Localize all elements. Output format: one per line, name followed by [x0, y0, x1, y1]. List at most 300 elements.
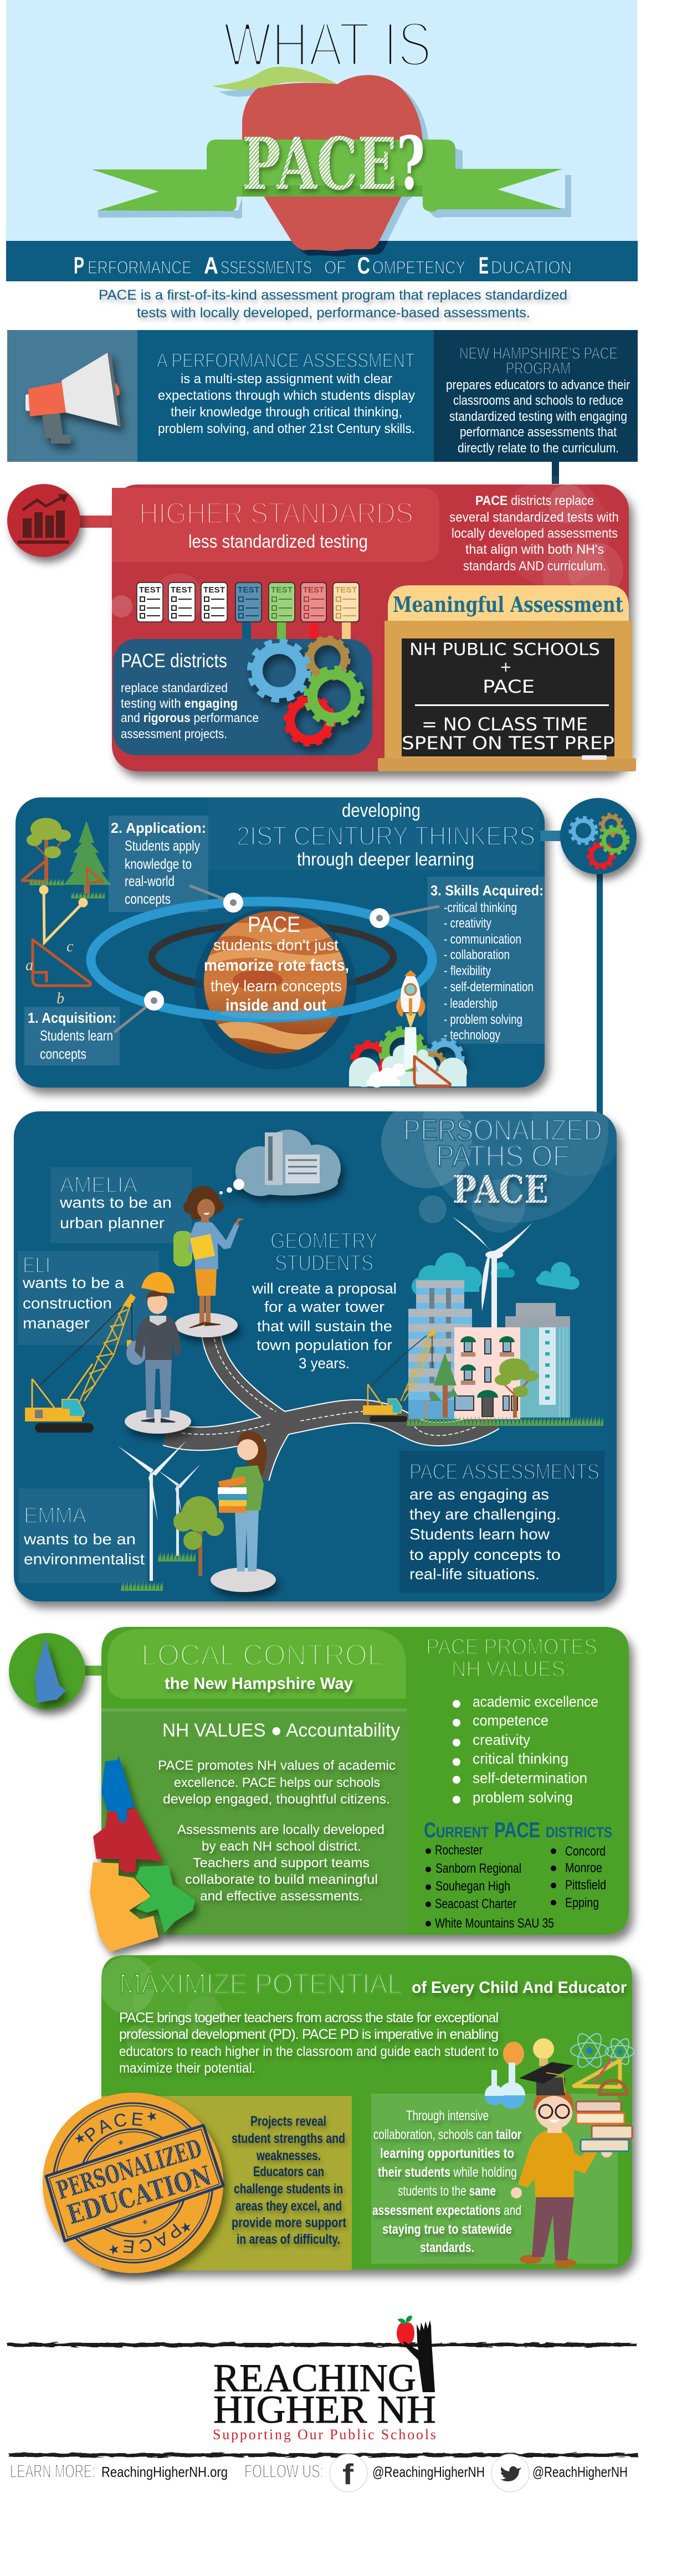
- text block: PACE districts replace: [449, 493, 619, 574]
- text block: geometry students: that will sustain the: [257, 1318, 392, 1335]
- glasses: [539, 2105, 569, 2118]
- text block: NH PACE program: standardized testing with engaging: [449, 409, 627, 424]
- text block: geometry students: [252, 1229, 397, 1372]
- tower left lower: [408, 1309, 472, 1419]
- acronym: Performance Assessments of Competency Education: C: [357, 253, 370, 279]
- card 2: TEST: [171, 585, 192, 595]
- panel background: [112, 485, 629, 771]
- smoke clouds: [349, 1045, 467, 1087]
- set square: [574, 2060, 620, 2087]
- text: projects reveal: Educators can: [253, 2164, 324, 2180]
- heading: current PACE districts: [424, 1818, 612, 1842]
- question mark: ?: [397, 121, 425, 207]
- body text: assessment projects.: [121, 727, 227, 741]
- hair: [146, 1290, 168, 1299]
- ruler triangle: [414, 1057, 450, 1086]
- panel: 21st century thinkers: [16, 797, 545, 1088]
- card 7: [333, 583, 359, 622]
- stars: ★: [72, 2130, 88, 2147]
- callout: Emma: wants to be an: [23, 1531, 136, 1548]
- illustration: orbit and planet: [91, 886, 438, 1069]
- subheading: less standardized testing: [188, 531, 368, 552]
- acronym: Performance Assessments of Competency Education: OMPETENCY: [372, 257, 465, 277]
- text: projects reveal: student strengths and: [232, 2131, 345, 2146]
- icon: twitter: [491, 2454, 529, 2492]
- trousers: [532, 2196, 574, 2260]
- heading: PACE promotes NH values: PACE PROMOTES: [426, 1635, 597, 1659]
- paragraph: professional development (PD). PACE PD is imperative in enabling: [119, 2027, 499, 2042]
- gears behind smoke: [352, 1028, 463, 1076]
- divider: brush line top: [8, 2343, 637, 2347]
- body text: [158, 1758, 396, 1904]
- panel: personalized paths: [12, 1111, 627, 1615]
- card 6: TEST: [303, 585, 324, 595]
- book stack: [576, 2101, 632, 2151]
- text: through intensive collaboration: assessment expectations and: [372, 2203, 521, 2218]
- stamp word: education: EDUCATION: [64, 2160, 215, 2231]
- text block: NH PACE program: directly relate to the curriculum.: [458, 441, 619, 456]
- apple shadow: [248, 80, 429, 255]
- stamp lettering ring: [72, 2108, 194, 2259]
- icon: apple: [397, 2316, 414, 2345]
- ribbon shadow strips: [98, 148, 571, 219]
- leaf: [212, 66, 337, 90]
- decorative bubbles: [100, 1956, 155, 2014]
- connector to higher standards: [552, 462, 559, 484]
- figure: Eli with crane: [25, 1272, 191, 1434]
- callout: Emma: environmentalist: [24, 1550, 145, 1568]
- dark ring: [152, 924, 393, 991]
- chalk text: +: [500, 659, 512, 676]
- hair: [533, 2088, 574, 2111]
- list: PACE districts: [425, 1843, 606, 1931]
- stamp banner: [46, 2125, 223, 2241]
- puzzle piece blue: [101, 1755, 135, 1823]
- panel: maximize potential: [40, 1955, 643, 2285]
- stars: *: [141, 2217, 150, 2232]
- text block: PACE districts replace: several standardized tests with: [449, 510, 619, 525]
- paragraph: [119, 2010, 499, 2076]
- illustration: road: [166, 1329, 493, 1478]
- intro text: tests with locally developed, performance-based assessments.: [137, 305, 530, 321]
- panel: local control: [83, 1627, 629, 1952]
- panel: higher standards: [78, 476, 629, 771]
- callout: skills: - communication: [444, 932, 521, 947]
- shoes: [520, 2255, 542, 2264]
- card 2: [168, 583, 195, 622]
- illustration: science icons: [485, 2031, 634, 2109]
- text block: PACE districts replace: locally developed assessments: [452, 526, 618, 541]
- text block: geometry students: for a water tower: [264, 1299, 384, 1315]
- subheading: the New Hampshire Way: [165, 1675, 353, 1693]
- icon: gears: [250, 638, 362, 744]
- callout: application: [109, 816, 208, 912]
- illustration: NH puzzle map: [90, 1755, 195, 1952]
- platform: [175, 1313, 238, 1337]
- heading: personalized paths of: [403, 1114, 602, 1173]
- books: [218, 1476, 248, 1513]
- card 5: [269, 583, 295, 622]
- heading: PACE promotes NH values: [426, 1635, 597, 1681]
- chalk text: = NO CLASS TIME: [422, 714, 588, 735]
- callout: Emma: EMMA: [24, 1503, 86, 1528]
- callout: Eli: manager: [23, 1315, 90, 1332]
- text block: PACE assessments: [399, 1451, 604, 1593]
- round tree: [495, 1358, 539, 1418]
- paragraph: PACE brings together teachers from across the state for exceptional: [119, 2010, 499, 2026]
- text block: a performance assessment: [157, 349, 415, 436]
- icon: chart circle: [7, 484, 80, 557]
- boom tip: [123, 1294, 136, 1308]
- list: NH values: critical thinking: [473, 1750, 568, 1767]
- acronym: Performance Assessments of Competency Education: A: [204, 253, 218, 279]
- pink building: [454, 1327, 520, 1419]
- card 1: [137, 583, 163, 622]
- body text: and rigorous performance: [121, 710, 259, 725]
- hand: [235, 1218, 244, 1226]
- card 1: TEST: [139, 585, 161, 595]
- skirt: [195, 1269, 217, 1296]
- list: NH values: [453, 1693, 598, 1806]
- text: projects reveal: in areas of difficulty.: [237, 2232, 340, 2247]
- footer: [10, 2454, 628, 2492]
- wood frame: [384, 621, 632, 759]
- icon: gears badge: [540, 798, 637, 874]
- text: through intensive collaboration: their students while holding: [378, 2165, 517, 2180]
- legs: [199, 1295, 204, 1323]
- callout: application: real-world: [125, 873, 175, 889]
- card 7: TEST: [335, 585, 357, 595]
- wind turbine large: [117, 1441, 186, 1581]
- pine tree: [429, 1353, 458, 1418]
- acronym: Performance Assessments of Competency Education: ERFORMANCE: [88, 257, 192, 277]
- panel: PACE districts: [113, 638, 372, 755]
- hair: [237, 1431, 267, 1478]
- callout: application: knowledge to: [125, 856, 192, 872]
- apple and ribbon illustration: [6, 66, 638, 281]
- heading: personalized paths of: PATHS OF: [436, 1140, 570, 1173]
- sweater: [518, 2131, 574, 2197]
- callout: Amelia: wants to be an: [59, 1194, 172, 1211]
- heading band: [107, 1629, 406, 1699]
- acronym: Performance Assessments of Competency Education: SSESSMENTS: [221, 257, 312, 277]
- sweater: [135, 1317, 181, 1360]
- PACE hatched wordmark: PACE: [242, 122, 397, 206]
- chalk: [582, 755, 607, 760]
- crane window: [35, 1410, 43, 1418]
- icon: megaphone: [25, 352, 121, 444]
- puzzle piece orange: [90, 1862, 158, 1952]
- list: PACE districts: Concord: [565, 1844, 606, 1859]
- tower right: [505, 1303, 570, 1418]
- text block: PACE districts replace: that align with both NH's: [465, 542, 604, 557]
- clouds: [412, 1253, 580, 1296]
- card connectors: [242, 620, 251, 640]
- text: through intensive collaboration: staying true to statewide: [382, 2222, 512, 2237]
- callout: Emma: [19, 1488, 147, 1583]
- heading band: [112, 488, 439, 562]
- collar: [150, 1316, 166, 1326]
- callout: skills: - flexibility: [444, 964, 491, 978]
- face: [237, 1439, 258, 1460]
- follow us: FOLLOW US:: [244, 2461, 324, 2481]
- tracks: [35, 1423, 94, 1433]
- text block: NH PACE program: prepares educators to advance their: [446, 378, 630, 393]
- text block: geometry students: GEOMETRY: [270, 1229, 378, 1253]
- leaf shadow: [219, 83, 260, 97]
- body text: develop engaged, thoughtful citizens.: [163, 1792, 390, 1807]
- top and arm: [188, 1222, 239, 1269]
- figure: teacher: [511, 2062, 632, 2268]
- rocket: [406, 1013, 416, 1029]
- heading: developing: developing: [342, 800, 421, 821]
- callout: Eli: construction: [23, 1295, 112, 1312]
- body text: excellence. PACE helps our schools: [174, 1775, 380, 1790]
- list: PACE districts: Monroe: [565, 1861, 602, 1876]
- grass: [407, 1416, 603, 1426]
- card 4: [235, 583, 262, 622]
- list: PACE districts: Rochester: [435, 1843, 483, 1858]
- callout: acquisition: Students learn: [40, 1027, 113, 1044]
- list: NH values: academic excellence: [473, 1693, 598, 1710]
- brain: [503, 2042, 524, 2066]
- crane body: [25, 1408, 82, 1421]
- website: ReachingHigherNH.org: [101, 2464, 228, 2480]
- callout: acquisition: 1. Acquisition:: [28, 1009, 116, 1026]
- paragraph: educators to reach higher in the classroom and guide each student to: [119, 2044, 499, 2059]
- hook: [127, 1340, 132, 1347]
- stars: [72, 2108, 194, 2259]
- icon: compass: [40, 887, 86, 942]
- callout: Eli: [18, 1251, 159, 1345]
- neck: [547, 2121, 562, 2133]
- decorative bubbles: [381, 1111, 617, 1233]
- hair: [183, 1186, 224, 1220]
- neck: [201, 1215, 209, 1223]
- stamp rings: [53, 2103, 213, 2263]
- tower left upper: [416, 1280, 464, 1310]
- book: [190, 1234, 215, 1260]
- wind turbine small: [158, 1464, 201, 1556]
- stamp: personalized education: [40, 2093, 232, 2284]
- stars: ★: [144, 2108, 160, 2125]
- text block: a performance assessment: their knowledge through critical thinking,: [171, 405, 402, 420]
- text block: a performance assessment: is a multi-step assignment with clear: [181, 372, 392, 387]
- text: projects reveal: weaknesses.: [256, 2148, 321, 2163]
- list: NH values: problem solving: [473, 1789, 573, 1806]
- text block: PACE districts replace: standards AND curriculum.: [463, 559, 606, 574]
- flower boxes: [461, 1352, 514, 1385]
- heading: PACE promotes NH values: NH VALUES:: [452, 1657, 571, 1681]
- shelf: [378, 758, 636, 771]
- text: projects reveal: challenge students in: [234, 2181, 343, 2197]
- callout: skills: - problem solving: [444, 1012, 522, 1027]
- callout: acquisition: [24, 1007, 120, 1065]
- ribbon inner shade: [242, 186, 423, 197]
- stamp banner inner line: [49, 2129, 219, 2237]
- heading: PACE districts: [121, 650, 227, 672]
- callout: application: Students apply: [125, 837, 200, 854]
- body text: testing with engaging: [121, 696, 238, 710]
- callout: skills: - self-determination: [444, 980, 534, 995]
- triangle labels: c: [66, 938, 74, 955]
- apple body: [242, 75, 423, 251]
- heading: current PACE districts: PACE: [494, 1818, 540, 1842]
- body text: Assessments are locally developed: [177, 1822, 384, 1837]
- hands: [601, 2146, 612, 2157]
- planet text: memorize rote facts,: [204, 956, 349, 975]
- jeans: [235, 1509, 259, 1572]
- icon: facebook: [330, 2454, 367, 2492]
- chalk text: SPENT ON TEST PREP: [402, 733, 614, 754]
- stars: *: [117, 2137, 126, 2153]
- triangle labels: [25, 938, 74, 1007]
- heading: PACE: PACE: [453, 1168, 548, 1212]
- panel background: [101, 1955, 632, 2269]
- bag: [126, 1341, 146, 1365]
- planet halo: [194, 908, 356, 1069]
- chalk text: [402, 640, 614, 754]
- text block: NH PACE program: PROGRAM: [506, 359, 571, 378]
- planet text: PACE: [248, 913, 300, 937]
- acronym: Performance Assessments of Competency Education: P: [74, 253, 84, 279]
- boom lattice: [79, 1305, 130, 1403]
- body text: [121, 681, 259, 741]
- legs: [145, 1358, 172, 1418]
- flask small: [485, 2070, 504, 2105]
- callout: Eli: ELI: [23, 1253, 50, 1277]
- figure: Emma with turbines: [117, 1431, 276, 1592]
- round tree: [27, 818, 71, 880]
- text block: geometry students: will create a proposal: [252, 1280, 397, 1297]
- icon connector: [78, 516, 116, 528]
- planet: [204, 911, 347, 1054]
- text: through intensive collaboration: learning opportunities to: [380, 2146, 514, 2161]
- grass right: [71, 892, 105, 899]
- illustration: rocket launching from gears: [349, 970, 467, 1088]
- pencil: [594, 2059, 612, 2083]
- acronym: Performance Assessments of Competency Education: [74, 253, 572, 279]
- acronym: Performance Assessments of Competency Education: OF: [324, 257, 346, 277]
- intro text: [99, 287, 567, 321]
- chalk text: NH PUBLIC SCHOOLS: [409, 640, 600, 660]
- text block: geometry students: STUDENTS: [275, 1251, 373, 1275]
- header background: [6, 0, 637, 241]
- face: [197, 1199, 215, 1219]
- heading: current PACE districts: C: [424, 1818, 436, 1842]
- text block: NH PACE program: [446, 344, 630, 456]
- card 5: TEST: [271, 585, 293, 595]
- smile: [203, 1213, 210, 1215]
- connector: vertical line to personalized paths: [597, 869, 603, 1119]
- list: NH values: creativity: [473, 1732, 530, 1748]
- head: [147, 1291, 167, 1314]
- heading: higher standards: HIGHER STANDARDS: [139, 497, 413, 530]
- callout: skills: - leadership: [444, 996, 498, 1011]
- stars: ★: [106, 2241, 122, 2259]
- triangle labels: b: [57, 990, 64, 1007]
- callout: acquisition: concepts: [40, 1045, 86, 1062]
- heading: maximize potential: MAXIMIZE POTENTIAL: [119, 1968, 402, 2000]
- curved text top: PACE: [84, 2112, 143, 2142]
- orbit dots: [144, 893, 389, 1011]
- icon: reaching hand: [403, 2320, 435, 2392]
- logo: reaching higher NH: HIGHER NH: [213, 2388, 436, 2431]
- text block: PACE assessments: are as engaging as: [409, 1486, 549, 1503]
- windows: [455, 1339, 517, 1416]
- tagline: Supporting Our Public Schools: [213, 2426, 436, 2443]
- text: through intensive collaboration: students to the same: [398, 2183, 496, 2199]
- text: projects reveal: provide more support: [232, 2215, 347, 2230]
- text block: a performance assessment: A PERFORMANCE ASSESSMENT: [157, 349, 415, 372]
- rocket trail: [403, 1027, 417, 1071]
- text block: PACE assessments: to apply concepts to: [409, 1546, 561, 1563]
- card 6: [301, 583, 326, 622]
- test cards: [137, 583, 359, 640]
- paragraph: maximize their potential.: [119, 2060, 255, 2076]
- list: PACE districts: Pittsfield: [565, 1878, 606, 1893]
- body text: PACE promotes NH values of academic: [158, 1758, 396, 1773]
- callout: Amelia: [50, 1167, 192, 1243]
- stamp word: personalized: PERSONALIZED: [53, 2134, 205, 2206]
- feet: [189, 1322, 221, 1328]
- arm with books: [573, 2143, 599, 2173]
- figure: Amelia: [173, 1186, 244, 1337]
- platform: [211, 1568, 276, 1592]
- callout: skills: [427, 877, 545, 1044]
- pine tree: [64, 821, 111, 894]
- band: acronym background: [6, 241, 638, 281]
- divider: brush line bottom: [9, 2453, 638, 2457]
- wordmark: REACHING: [213, 2357, 416, 2400]
- body text: replace standardized: [121, 681, 228, 695]
- callout: skills: - creativity: [444, 916, 491, 931]
- decorative bubbles: [499, 476, 609, 587]
- title: WHAT IS: WHAT IS: [223, 9, 432, 79]
- list: NH values: self-determination: [473, 1770, 587, 1786]
- text block: PACE assessments: PACE ASSESSMENTS: [409, 1460, 599, 1484]
- backpack: [173, 1231, 192, 1266]
- list: NH values: competence: [473, 1712, 548, 1729]
- callout: application: concepts: [125, 890, 171, 907]
- grass patches: [158, 1552, 196, 1562]
- acronym: Performance Assessments of Competency Education: E: [479, 253, 489, 279]
- grass left: [29, 878, 64, 885]
- heading: current PACE districts: URRENT: [436, 1824, 489, 1841]
- text block: NH PACE program: NEW HAMPSHIRE'S PACE: [459, 344, 618, 363]
- panel background: [14, 1111, 617, 1601]
- text block: a performance assessment: expectations through which students display: [158, 388, 415, 403]
- box: olive: [101, 2096, 352, 2270]
- atom left: [571, 2031, 608, 2070]
- logo: reaching higher NH: [213, 2316, 436, 2443]
- twitter handle: @ReachHigherNH: [532, 2464, 628, 2480]
- icon: NH state badge: [9, 1633, 85, 1709]
- blackboard: [402, 638, 614, 756]
- body text: collaborate to build meaningful: [185, 1872, 378, 1887]
- heading band: [208, 797, 539, 870]
- illustration: trees and triangles: [22, 818, 111, 899]
- crane small: [363, 1329, 436, 1422]
- callout: Amelia: urban planner: [60, 1214, 165, 1232]
- list: PACE districts: Sanborn Regional: [435, 1861, 521, 1876]
- cab: [62, 1399, 84, 1416]
- crane: [25, 1294, 136, 1433]
- stars: ★: [178, 2219, 194, 2237]
- callout: skills: 3. Skills Acquired:: [430, 882, 544, 899]
- learn more: LEARN MORE:: [10, 2461, 95, 2481]
- curved text bottom: PACE: [123, 2224, 182, 2254]
